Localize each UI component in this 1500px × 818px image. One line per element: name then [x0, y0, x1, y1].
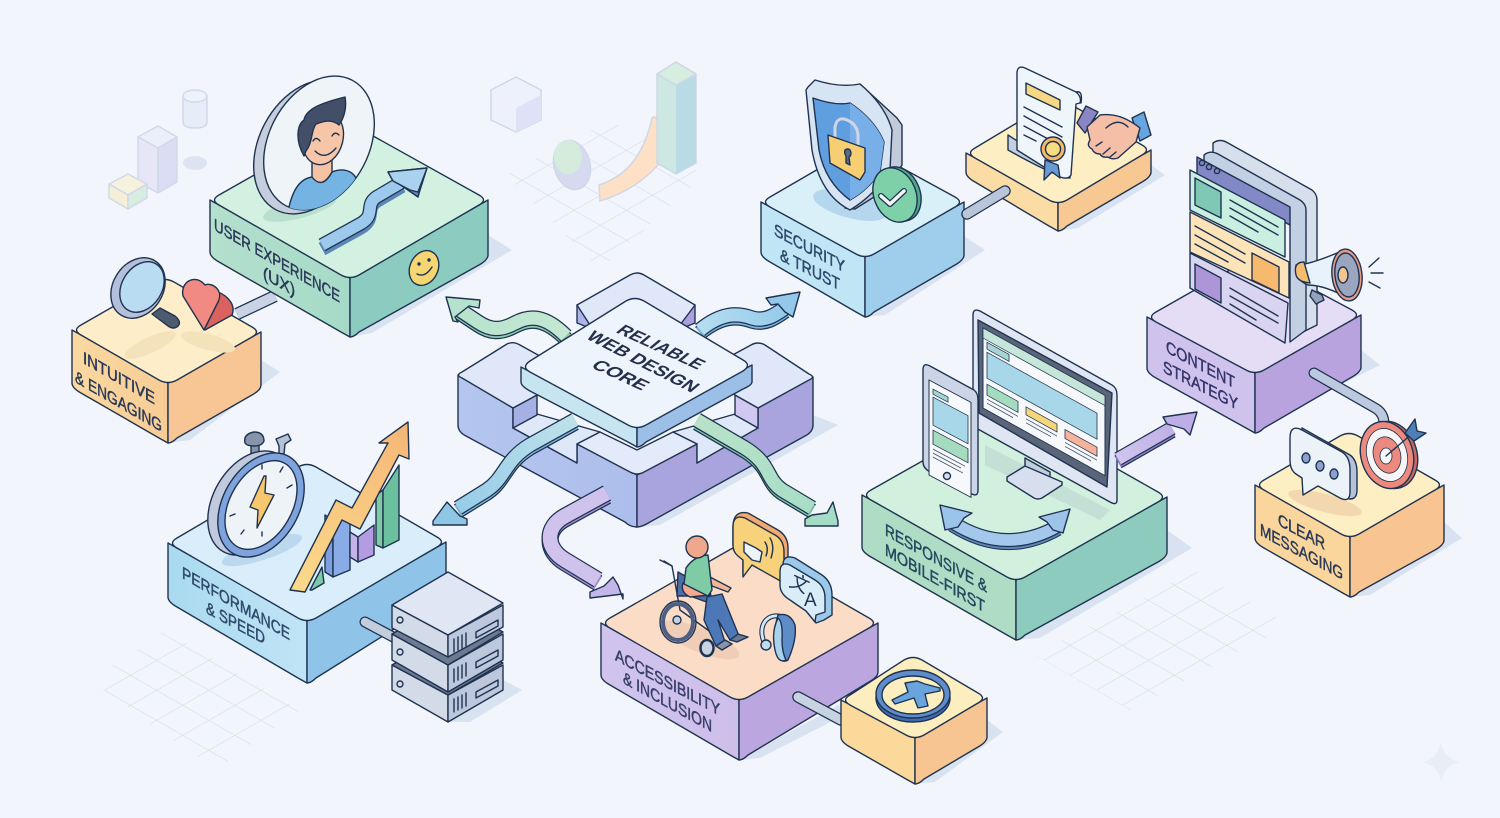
icon: stopwatch — [190, 432, 322, 572]
label: PERFORMANCE — [182, 562, 290, 644]
label: ACCESSIBILITY — [615, 645, 720, 720]
core back arm — [577, 273, 695, 330]
connector: performance to server — [365, 622, 395, 638]
back sheets — [1213, 140, 1317, 332]
background grid: top centre — [505, 120, 705, 270]
core label: WEB DESIGN — [582, 328, 704, 395]
shadow — [1350, 522, 1462, 597]
icon: translation bubble — [780, 557, 832, 623]
block: security and trust — [761, 148, 985, 317]
icon: smiley — [404, 246, 444, 290]
right face — [865, 202, 964, 317]
block: intuitive and engaging — [72, 280, 280, 443]
label: CONTENT — [1166, 337, 1235, 392]
icon: hearing aid — [761, 614, 795, 661]
label: MESSAGING — [1260, 520, 1343, 584]
purple panel — [1190, 253, 1288, 343]
label: (UX) — [263, 262, 295, 300]
connector: accessibility to badge — [798, 697, 841, 720]
core ledge right — [673, 414, 758, 463]
block: responsive and mobile-first — [862, 412, 1192, 640]
shadow — [168, 360, 280, 443]
server unit 1 — [392, 572, 503, 657]
label: & ENGAGING — [75, 366, 162, 436]
server unit 2 — [392, 602, 503, 692]
shadow — [1058, 165, 1165, 231]
icon: user portrait disc — [252, 75, 376, 222]
icon: accessibility ring — [876, 670, 950, 722]
block: trust tile — [966, 100, 1165, 231]
right face — [1058, 150, 1151, 231]
arrow: core to accessibility — [550, 493, 623, 599]
core left face — [458, 375, 637, 527]
top face — [866, 412, 1162, 580]
block: clear messaging — [1255, 434, 1462, 597]
core plate left side — [521, 367, 637, 447]
decorative shapes: top centre — [491, 62, 696, 201]
label: USER EXPERIENCE — [214, 214, 340, 306]
right face — [1255, 315, 1361, 433]
label: & INCLUSION — [623, 667, 712, 736]
background grid: bottom right — [1035, 570, 1290, 710]
core front arm — [577, 432, 697, 474]
block: accessibility badge tile — [841, 658, 1003, 784]
chart: rising bars with arrow — [290, 422, 409, 592]
sound lines — [1369, 258, 1383, 288]
connector: content to target — [1314, 373, 1384, 424]
core right face — [637, 377, 813, 527]
core plate right side — [637, 365, 752, 447]
label: & TRUST — [780, 245, 840, 294]
green panel — [1190, 170, 1285, 257]
icon: server rack — [392, 572, 522, 722]
shadow — [350, 235, 512, 337]
icon: smartphone — [923, 365, 978, 497]
right face — [739, 623, 878, 760]
label: STRATEGY — [1163, 357, 1238, 414]
left face — [1147, 317, 1255, 433]
block: accessibility and inclusion — [601, 546, 878, 760]
shadow — [915, 720, 1003, 784]
top face — [606, 546, 874, 700]
block: content strategy — [1147, 260, 1380, 433]
monitor screen — [983, 328, 1105, 476]
header window — [1197, 157, 1290, 225]
icon: chat bubble — [1286, 428, 1364, 522]
core left arm — [458, 343, 565, 428]
top face — [970, 100, 1146, 202]
right face — [915, 698, 987, 784]
label: RESPONSIVE & — [885, 519, 987, 596]
label — [75, 347, 162, 436]
icon: megaphone — [1295, 248, 1383, 304]
icon: desktop monitor — [973, 310, 1117, 520]
icon: shield with lock — [806, 80, 929, 229]
right face — [350, 200, 488, 337]
top face — [172, 464, 442, 620]
right face — [1350, 485, 1444, 597]
icon: target with arrow — [1353, 415, 1426, 495]
icon: certificate — [1008, 67, 1081, 180]
label: INTUITIVE — [83, 347, 155, 408]
shadow — [739, 705, 850, 760]
decorative shapes: top left — [109, 90, 207, 209]
label: CLEAR — [1278, 510, 1325, 554]
core ledge left — [513, 414, 600, 463]
left face — [966, 153, 1058, 231]
shadow — [1016, 530, 1192, 640]
monitor frame — [978, 320, 1112, 487]
arrow: core to responsive — [697, 420, 838, 526]
left face — [601, 623, 739, 760]
core shadow — [637, 415, 838, 527]
left face — [72, 330, 168, 443]
top face — [76, 280, 256, 382]
block: performance and speed — [168, 464, 446, 683]
block: user experience — [210, 124, 512, 337]
orange panel — [1190, 212, 1289, 298]
shadow — [865, 236, 985, 317]
top face — [214, 124, 484, 278]
arrow: core to performance — [433, 420, 575, 525]
core right arm — [705, 343, 812, 428]
central core: reliable web design core — [458, 273, 838, 527]
left face — [210, 200, 350, 337]
top face — [766, 148, 960, 256]
arrow: responsive to content — [1118, 412, 1197, 462]
monitor shadow — [985, 445, 1110, 520]
label — [214, 214, 340, 306]
label: MOBILE-FIRST — [885, 539, 985, 616]
core label: RELIABLE — [612, 322, 710, 372]
top face — [846, 658, 982, 738]
icon: translation bubble: 文 — [786, 570, 813, 598]
top face — [1260, 434, 1440, 536]
left face — [761, 202, 865, 317]
monitor stand — [1007, 458, 1062, 499]
icon: translation bubble: A — [804, 590, 817, 611]
icon: sync arrows — [940, 505, 1070, 543]
top face — [1152, 260, 1356, 372]
right face — [168, 332, 261, 443]
core label: CORE — [587, 357, 654, 393]
arrow: core to user experience — [446, 297, 566, 339]
arrow: core to security — [700, 292, 800, 333]
shadow — [1320, 350, 1380, 395]
core plate top — [526, 298, 748, 428]
icon: handshake — [1077, 106, 1151, 159]
left face — [841, 700, 915, 784]
server unit 3 — [392, 632, 503, 722]
right face — [1016, 497, 1167, 640]
arrow: user experience growth arrow — [322, 168, 427, 249]
connector: intuitive to user experience — [237, 296, 275, 314]
monitor body — [973, 310, 1117, 504]
icon: wheelchair user — [657, 536, 748, 667]
icon: stacked web pages — [1190, 140, 1317, 343]
right face — [307, 542, 446, 683]
icon: speech bubble with megaphone — [733, 513, 788, 583]
left face — [1255, 485, 1350, 597]
label: SECURITY — [774, 220, 845, 276]
left face — [862, 495, 1016, 640]
label — [1260, 510, 1343, 584]
background grid: bottom left — [90, 630, 300, 770]
icon: magnifier and heart — [100, 248, 237, 364]
label: & SPEED — [206, 598, 265, 648]
left face — [168, 543, 307, 683]
watermark sparkle — [1422, 742, 1460, 782]
connector: security to trust — [967, 191, 1005, 214]
